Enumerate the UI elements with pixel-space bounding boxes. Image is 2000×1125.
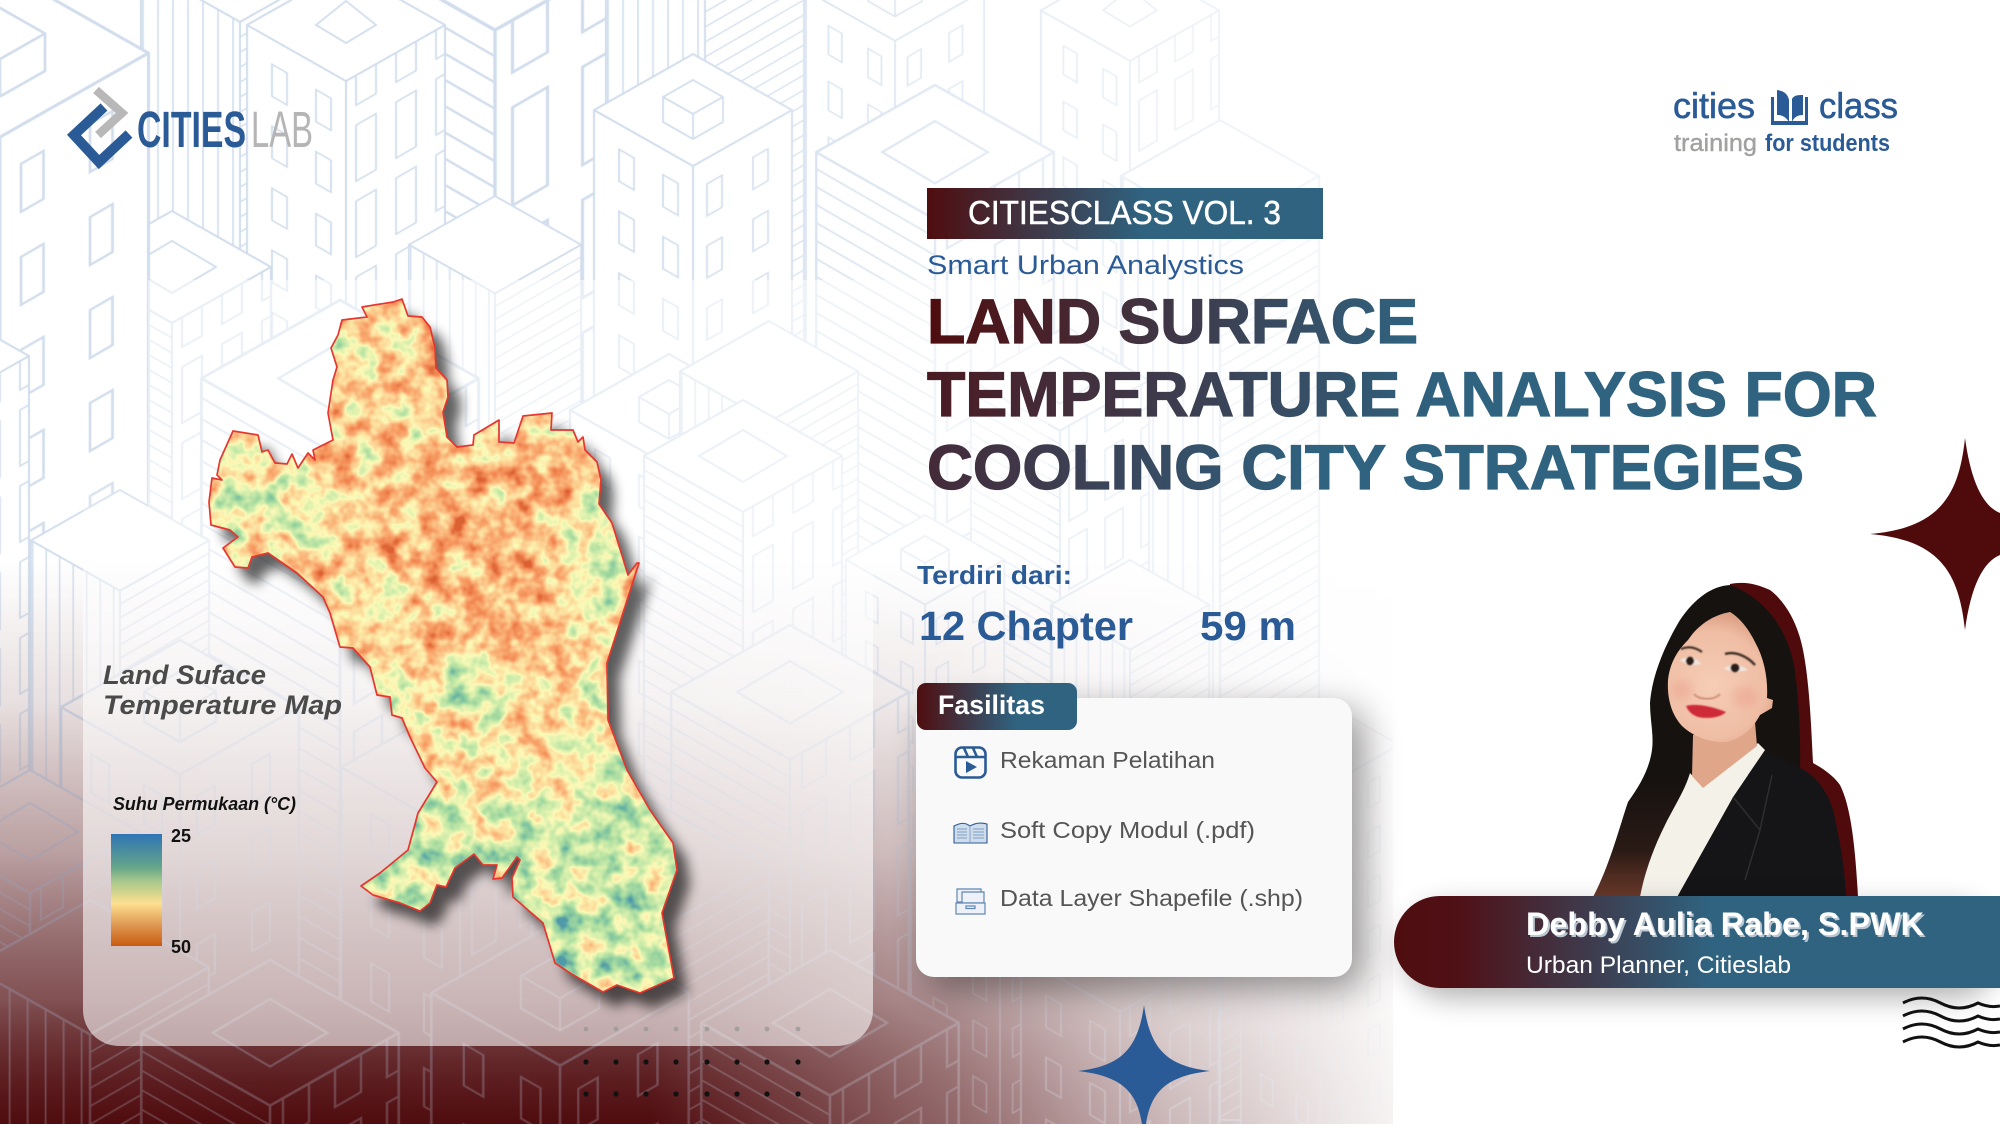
icon: open book bbox=[1771, 90, 1808, 125]
portrait maroon cutout bbox=[1730, 583, 1858, 897]
portrait face bbox=[1668, 612, 1773, 742]
panel: map card bbox=[83, 440, 873, 1046]
portrait lips bbox=[1686, 705, 1726, 718]
instructor role: Urban Planner, Citieslab bbox=[1526, 952, 1791, 979]
map boundary bbox=[209, 299, 677, 993]
legend colour bar bbox=[111, 834, 162, 946]
star: blue bbox=[1078, 1005, 1210, 1124]
background: fade overlays bbox=[0, 0, 1400, 1125]
logo: Citieslab bbox=[74, 90, 313, 162]
portrait eyes bbox=[1680, 647, 1755, 672]
portrait shirt buttons and lapel bbox=[1733, 775, 1772, 880]
course info bbox=[917, 560, 1296, 649]
wordmark class: class bbox=[1819, 85, 1898, 126]
course info: 12 Chapter bbox=[919, 603, 1133, 649]
tagline for students: for students bbox=[1765, 130, 1890, 157]
tab: Fasilitas bbox=[917, 683, 1077, 730]
portrait nose bbox=[1694, 694, 1720, 699]
decorative waves bbox=[1903, 998, 2000, 1047]
facility: shapefile: Data Layer Shapefile (.shp) bbox=[1000, 885, 1303, 911]
logo: cities class bbox=[1673, 85, 1898, 157]
logo wordmark: LAB bbox=[251, 101, 313, 158]
portrait: instructor bbox=[1593, 583, 1858, 897]
map: land surface temperature bbox=[190, 280, 700, 1010]
portrait neck bbox=[1692, 722, 1757, 788]
portrait jacket bbox=[1677, 750, 1846, 897]
icon: Citieslab chevrons bbox=[74, 90, 129, 162]
title: COOLING CITY STRATEGIES bbox=[927, 433, 1804, 503]
portrait hair bbox=[1593, 585, 1800, 897]
legend: surface temperature bbox=[111, 794, 296, 957]
map caption: Temperature Map bbox=[103, 690, 342, 720]
icon: book bbox=[954, 823, 987, 843]
background maroon gradient bbox=[0, 654, 1386, 1124]
title: TEMPERATURE ANALYSIS FOR bbox=[927, 360, 1877, 430]
legend value 25: 25 bbox=[171, 826, 191, 846]
course info: Terdiri dari: bbox=[917, 560, 1072, 590]
map shadow bbox=[222, 314, 690, 1008]
panel: facilities card bbox=[916, 683, 1364, 989]
map caption: Land Suface bbox=[103, 660, 266, 690]
banner shadow bbox=[1404, 906, 2000, 998]
map heat raster bbox=[210, 300, 676, 992]
banner pill bbox=[1394, 896, 2000, 988]
title: LAND SURFACE bbox=[927, 287, 1418, 357]
icon: file cabinet bbox=[956, 889, 985, 914]
portrait shirt bbox=[1640, 743, 1765, 897]
course info: 59 m bbox=[1200, 603, 1296, 649]
instructor name shadow: Debby Aulia Rabe, S.PWK bbox=[1528, 908, 1926, 944]
tagline training: training bbox=[1674, 130, 1757, 157]
subtitle: Smart Urban Analystics bbox=[927, 250, 1244, 280]
icon: video recording bbox=[956, 748, 986, 778]
instructor name: Debby Aulia Rabe, S.PWK bbox=[1526, 906, 1924, 942]
wordmark cities: cities bbox=[1673, 85, 1755, 126]
legend title: Suhu Permukaan (°C) bbox=[113, 794, 296, 814]
facility: recording: Rekaman Pelatihan bbox=[1000, 747, 1215, 773]
logo wordmark: CITIES bbox=[137, 101, 246, 158]
tab: Fasilitas: Fasilitas bbox=[938, 690, 1045, 720]
badge: Citiesclass vol. 3 bbox=[927, 188, 1323, 239]
title bbox=[927, 287, 1877, 503]
legend value 50: 50 bbox=[171, 937, 191, 957]
star: maroon bbox=[1870, 438, 2000, 630]
map caption bbox=[103, 660, 342, 720]
name banner bbox=[1394, 896, 2000, 998]
portrait cheeks bbox=[1671, 680, 1758, 708]
facility: module: Soft Copy Modul (.pdf) bbox=[1000, 817, 1255, 843]
badge: Citiesclass vol. 3: CITIESCLASS VOL. 3 bbox=[968, 194, 1281, 231]
decorative dots bbox=[583, 1027, 801, 1097]
